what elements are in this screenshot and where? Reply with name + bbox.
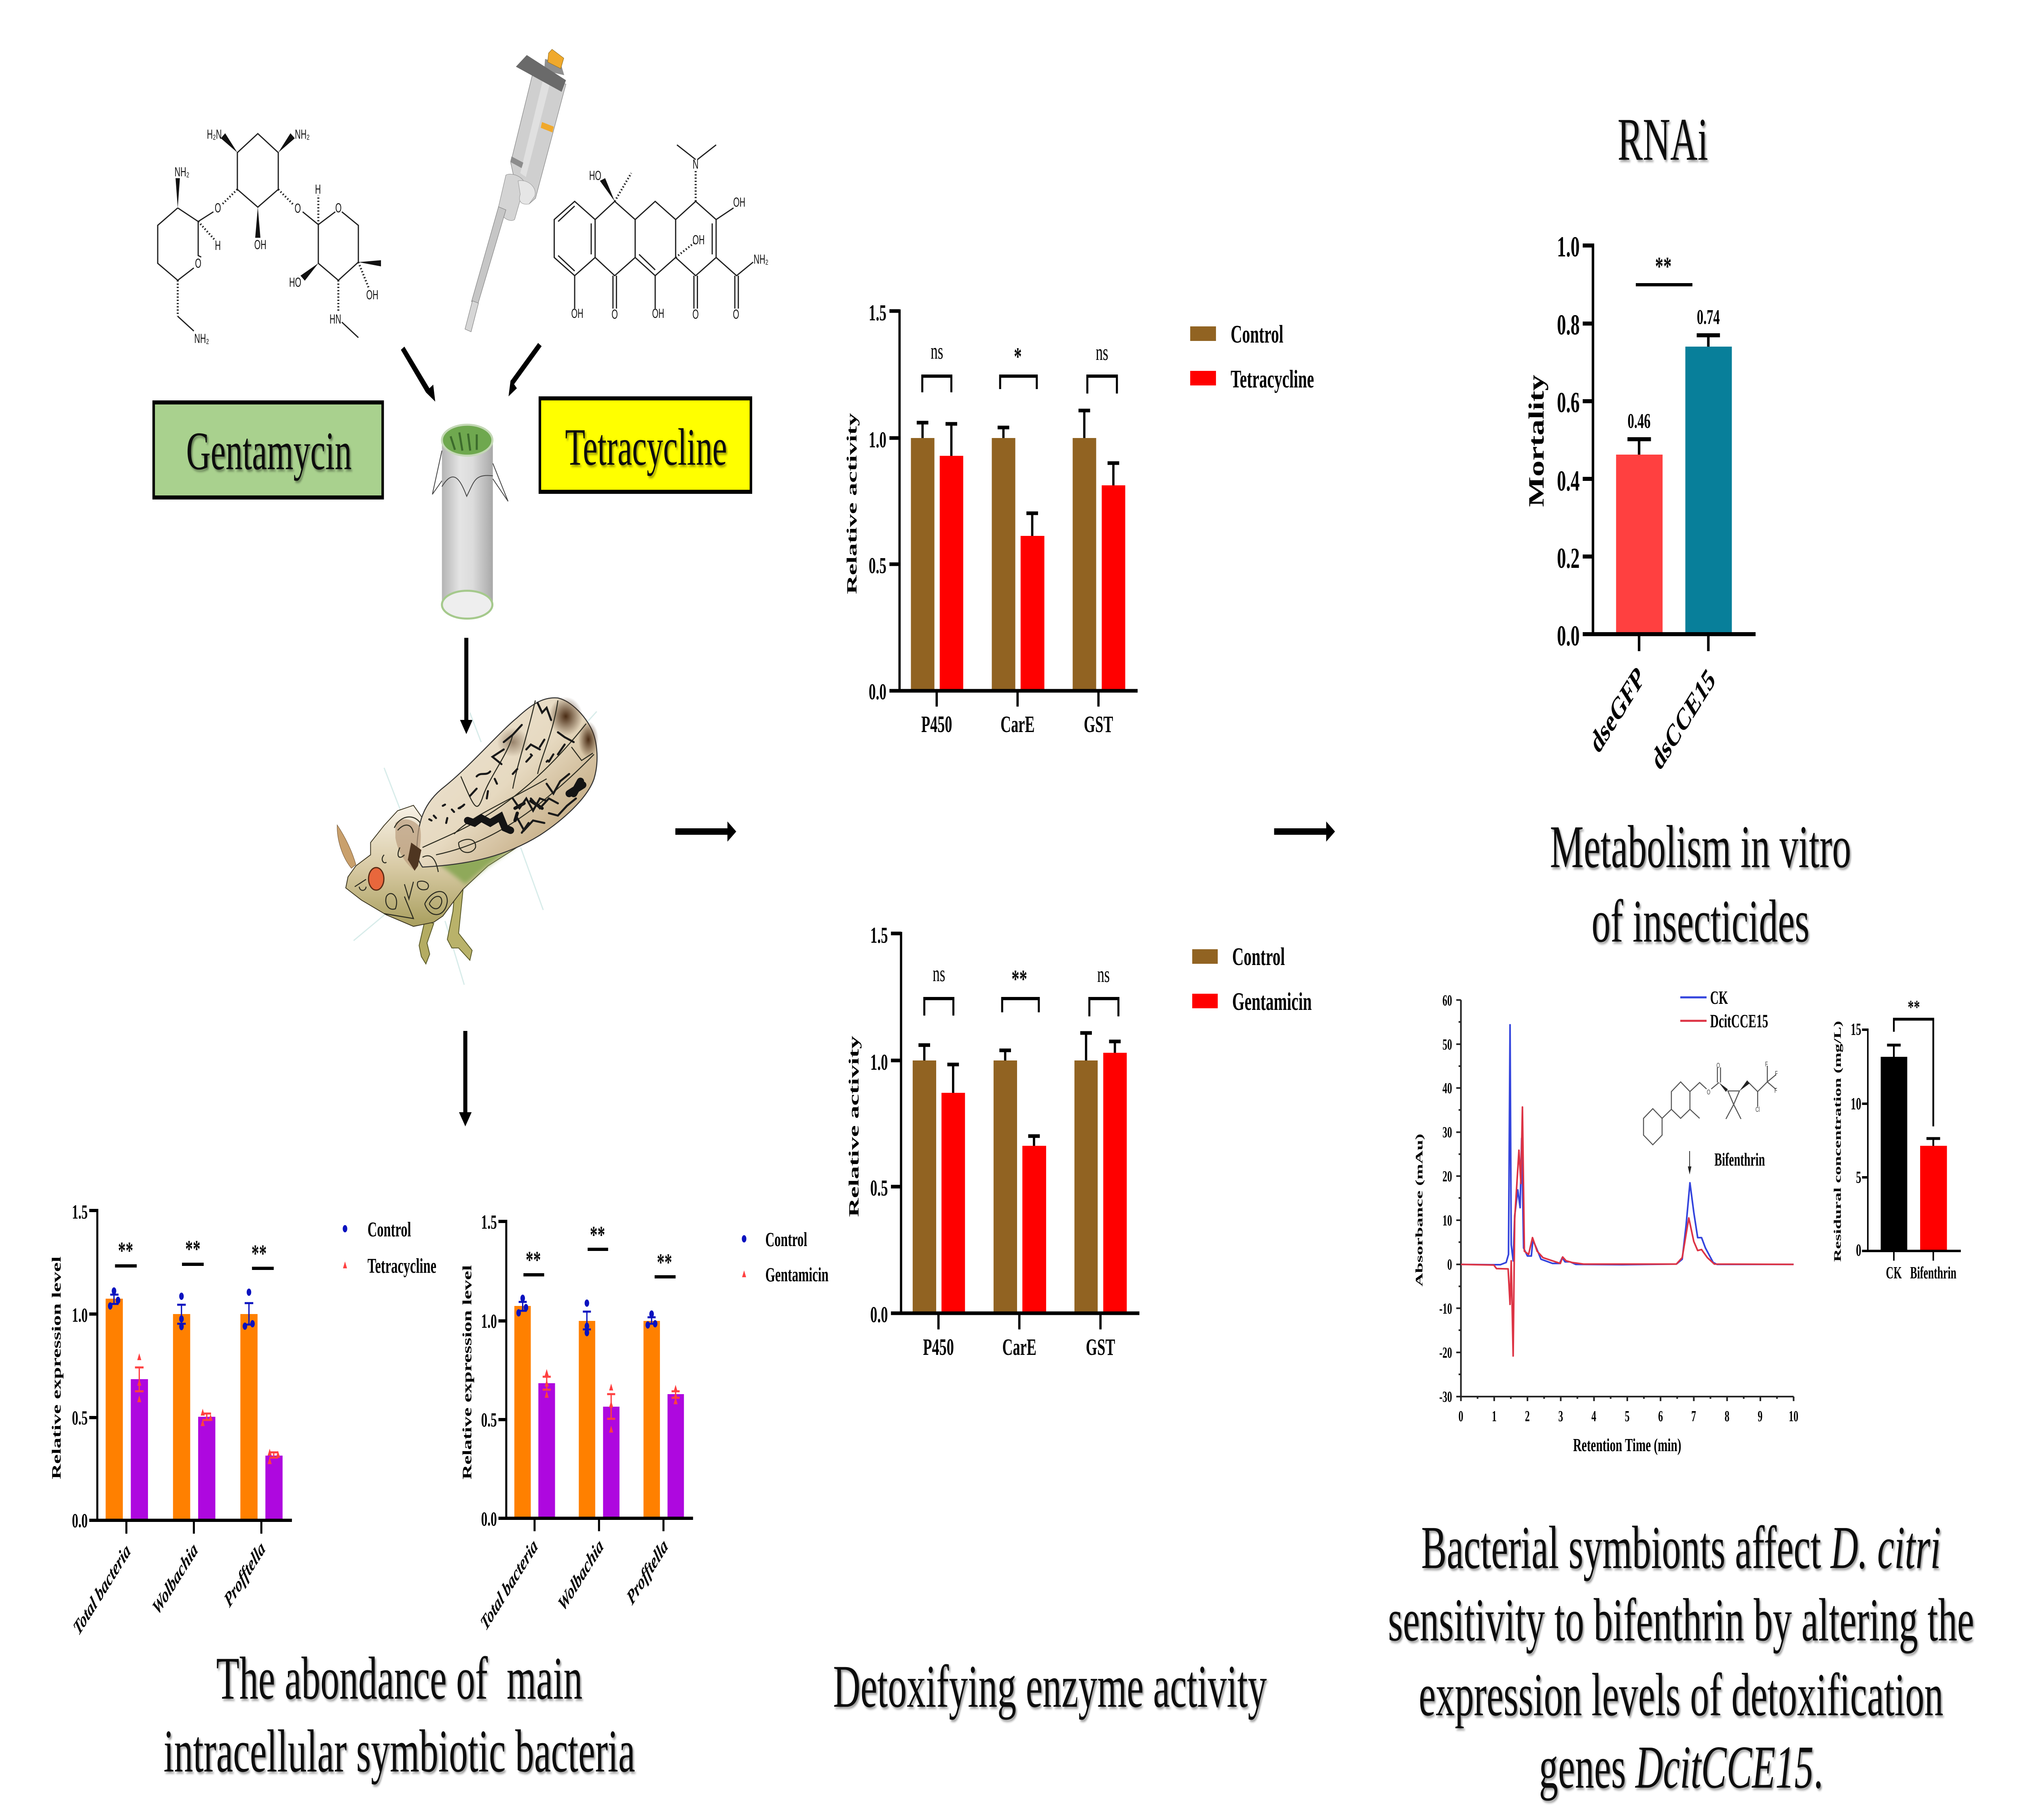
chart: mortality after RNAi (1524, 231, 1756, 777)
tick labels: -20 (1439, 1344, 1452, 1361)
axis labels (461, 1211, 670, 1635)
significance marks (115, 1235, 274, 1268)
significance mark: ** (1655, 252, 1671, 281)
axes (1583, 243, 1756, 651)
significance marks: ** (252, 1240, 266, 1267)
axis labels: Relative expression level (461, 1265, 474, 1479)
molecule: bifenthrin: F (1775, 1069, 1778, 1078)
significance brackets: ns (1096, 340, 1108, 365)
error bars (918, 1033, 1121, 1146)
axis labels (1832, 1020, 1956, 1282)
legend: Tetracycline (1231, 365, 1314, 393)
axis labels: CarE (1000, 712, 1035, 737)
molecule: gentamycin structure (158, 127, 381, 346)
legend: DcitCCE15 (1710, 1011, 1768, 1032)
arrow: bifenthrin peak (1688, 1151, 1691, 1175)
treatment points and error bars (543, 1369, 680, 1433)
axis labels: dseGFP (1586, 660, 1649, 760)
error bars (1887, 1045, 1940, 1146)
axis labels: 1.0 (481, 1310, 497, 1333)
axis labels: 1.5 (870, 923, 888, 948)
molecule: gentamycin structure: O (195, 256, 201, 271)
icon: feeding tube (432, 425, 508, 619)
axis labels: Relative activity (846, 1036, 862, 1217)
axis labels: CK (1886, 1263, 1902, 1282)
molecule: gentamycin structure: NH₂ (295, 127, 310, 142)
axes (89, 1209, 292, 1534)
legend (742, 1229, 829, 1286)
axis labels: 1.0 (72, 1304, 88, 1327)
molecule: gentamycin structure: H (315, 182, 321, 197)
significance brackets (922, 339, 1117, 394)
axis labels: Relative expression level (50, 1256, 63, 1479)
molecule: tetracycline structure: N (693, 157, 698, 171)
axis labels: 0.5 (72, 1407, 88, 1429)
axis labels: 0.0 (481, 1508, 497, 1530)
axis titles: Retention Time (min) (1573, 1435, 1681, 1456)
axis labels: 0.4 (1557, 465, 1580, 497)
tick labels: 30 (1442, 1124, 1452, 1141)
axis labels: 1.5 (481, 1211, 497, 1234)
tick labels: 60 (1442, 992, 1452, 1009)
chart: symbiont abundance, tetracycline (50, 1201, 436, 1640)
legend (1192, 943, 1312, 1016)
chart: HPLC chromatogram (1414, 987, 1798, 1456)
significance marks: ** (590, 1221, 605, 1248)
axis labels: Profftella (221, 1537, 268, 1612)
bars (106, 1299, 283, 1520)
heading: conclusion: Bacterial symbionts affect D. citri (1421, 1514, 1941, 1582)
heading: metabolism in vitro: Metabolism in vitro (1550, 814, 1851, 881)
legend: Gentamicin (765, 1264, 829, 1286)
axis titles: Absorbance (mAu) (1414, 1134, 1425, 1287)
axis labels: 0.8 (1557, 309, 1580, 341)
treatment points and error bars (135, 1353, 280, 1464)
legend: CK (1710, 987, 1728, 1008)
axis labels: dsCCE15 (1648, 662, 1720, 777)
legend: Control (1231, 320, 1284, 348)
axis labels: 5 (1856, 1168, 1861, 1187)
significance bracket: ** (1908, 996, 1920, 1018)
tick labels: 1 (1492, 1407, 1497, 1424)
axis labels: 0.0 (870, 1302, 888, 1327)
arrow: symbionts to enzyme activity (675, 821, 736, 842)
axis labels: 1.5 (869, 301, 886, 326)
arrow: enzyme activity to RNAi (1274, 821, 1335, 842)
axis labels: 1.0 (1557, 231, 1580, 263)
molecule: gentamycin structure: O (335, 201, 342, 215)
axis labels: 15 (1851, 1020, 1861, 1039)
molecule: tetracycline structure: NH₂ (754, 252, 768, 267)
heading: symbiont abundance: The abondance of main (216, 1645, 582, 1712)
axes (1862, 1029, 1961, 1261)
bars (1616, 347, 1732, 634)
tick labels: 50 (1442, 1036, 1452, 1053)
heading: conclusion: genes DcitCCE15. (1539, 1734, 1823, 1801)
chart: enzyme activity, tetracycline (844, 301, 1314, 737)
tick labels: 7 (1691, 1407, 1696, 1424)
heading: RNAi: RNAi (1618, 106, 1708, 174)
tick labels: 9 (1758, 1407, 1762, 1424)
significance marks: ** (118, 1237, 133, 1264)
axis labels: 0.6 (1557, 386, 1580, 419)
heading: conclusion (1388, 1514, 1974, 1801)
molecule: tetracycline structure: HO (589, 168, 601, 183)
axis labels: 0.5 (481, 1409, 497, 1431)
molecule: gentamycin structure: H₂N (207, 127, 222, 142)
legend (1680, 987, 1768, 1032)
significance brackets: * (1014, 343, 1022, 370)
axis labels: 0.0 (1557, 620, 1580, 652)
arrow: gentamycin to tube (401, 347, 435, 402)
molecule: tetracycline structure: O (733, 307, 739, 322)
axis labels: 0 (1856, 1241, 1861, 1260)
tick labels: 40 (1442, 1079, 1452, 1096)
traces (1461, 1025, 1794, 1356)
axis labels: 0.5 (869, 553, 886, 578)
legend: Control (1232, 943, 1285, 971)
heading: conclusion: sensitivity to bifenthrin by altering the (1388, 1587, 1974, 1654)
significance brackets: ** (1011, 965, 1027, 993)
axis labels (846, 923, 1115, 1360)
icon: psyllid insect (337, 697, 599, 985)
control points and error bars (108, 1287, 255, 1330)
significance bracket (1894, 996, 1933, 1126)
axis labels: Bifenthrin (1910, 1263, 1956, 1282)
molecule: tetracycline structure: OH (571, 306, 583, 321)
tick labels: 3 (1558, 1407, 1563, 1424)
arrow: psyllid to symbiont charts (459, 1031, 472, 1126)
value labels: 0.74 (1697, 305, 1720, 329)
heading: detoxifying enzyme activity: Detoxifying enzyme activity (833, 1653, 1267, 1721)
legend (343, 1218, 436, 1278)
axis labels: Wolbachia (150, 1538, 201, 1619)
significance marks: ** (185, 1235, 201, 1262)
axis labels (1524, 231, 1720, 777)
tick labels (1439, 992, 1798, 1424)
axis labels: Relative activity (844, 413, 860, 594)
axis labels: Mortality (1524, 375, 1548, 507)
tick labels: -10 (1439, 1300, 1452, 1317)
axis labels: Wolbachia (555, 1534, 606, 1616)
arrow: tube to psyllid (460, 638, 473, 734)
molecule: gentamycin structure: HN (330, 312, 341, 326)
significance mark (1636, 252, 1692, 285)
axis labels: CarE (1002, 1335, 1036, 1360)
heading: metabolism in vitro: of insecticides (1592, 888, 1809, 955)
molecule: bifenthrin: F (1765, 1060, 1768, 1069)
axis labels: 0.2 (1557, 542, 1580, 574)
molecule: tetracycline structure (554, 145, 768, 322)
axis labels (844, 301, 1113, 737)
error bars (917, 411, 1119, 536)
molecule: gentamycin structure: O (294, 201, 301, 216)
significance brackets (924, 961, 1119, 1016)
molecule: gentamycin structure: OH (254, 237, 266, 252)
axis labels: P450 (921, 712, 952, 737)
label: Tetracycline (540, 398, 751, 492)
tick labels: -30 (1439, 1388, 1452, 1405)
label: Tetracycline: Tetracycline (565, 418, 727, 476)
tick labels: 0 (1447, 1256, 1452, 1273)
molecule: bifenthrin: Bifenthrin (1714, 1150, 1765, 1170)
bars (913, 1053, 1127, 1313)
legend (1190, 320, 1314, 393)
significance marks: ** (657, 1249, 672, 1276)
heading: conclusion: expression levels of detoxification (1419, 1661, 1943, 1729)
axis labels: Total bacteria (70, 1539, 133, 1640)
bars (1881, 1057, 1947, 1251)
molecule: bifenthrin: Cl (1756, 1105, 1760, 1114)
chart: symbiont abundance, gentamicin (461, 1211, 829, 1635)
axis labels: Profftella (624, 1534, 670, 1610)
axis labels: Total bacteria (478, 1534, 541, 1635)
molecule: gentamycin structure: H (215, 238, 221, 253)
axes (891, 932, 1140, 1329)
error bars (1627, 335, 1720, 455)
tick labels: 10 (1789, 1407, 1798, 1424)
significance brackets: ns (931, 339, 943, 364)
molecule: bifenthrin: F (1775, 1086, 1777, 1095)
label: Gentamycin: Gentamycin (186, 421, 352, 481)
arrow: tetracycline to tube (509, 343, 541, 396)
tick labels: 20 (1442, 1168, 1452, 1185)
legend: Gentamicin (1232, 988, 1312, 1016)
legend: Tetracycline (368, 1254, 436, 1278)
molecule: gentamycin structure: NH₂ (194, 331, 209, 346)
bars (514, 1306, 684, 1518)
label: Gentamycin (154, 402, 383, 497)
molecule: tetracycline structure: OH (733, 195, 745, 210)
tick labels: 8 (1725, 1407, 1730, 1424)
axis labels: GST (1086, 1335, 1115, 1360)
axis labels: P450 (923, 1335, 954, 1360)
axis titles (1414, 1134, 1681, 1456)
axis labels: Residural concentration (mg/L) (1832, 1021, 1843, 1262)
heading: metabolism in vitro (1550, 814, 1851, 955)
legend: Control (765, 1229, 807, 1251)
axis labels: GST (1084, 712, 1113, 737)
legend: Control (368, 1218, 411, 1241)
heading: symbiont abundance (163, 1645, 635, 1785)
tick labels: 5 (1625, 1407, 1630, 1424)
molecule: bifenthrin: O (1716, 1061, 1720, 1070)
significance brackets: ns (933, 961, 945, 986)
tick labels: 2 (1525, 1407, 1530, 1424)
tick labels: 10 (1442, 1212, 1452, 1229)
molecule: gentamycin structure: OH (366, 288, 379, 302)
significance marks (523, 1221, 676, 1277)
molecule: gentamycin structure: O (215, 201, 221, 215)
chart: enzyme activity, gentamicin (846, 923, 1312, 1360)
axis labels: 0.0 (869, 679, 886, 705)
tick labels: 4 (1591, 1407, 1596, 1424)
molecule: tetracycline structure: O (692, 307, 699, 322)
axis labels: 0.5 (870, 1176, 888, 1201)
value labels (1628, 305, 1720, 433)
bars (911, 438, 1125, 691)
molecule: tetracycline structure: OH (652, 306, 664, 321)
tick labels: 6 (1658, 1407, 1663, 1424)
molecule: tetracycline structure: O (611, 307, 618, 322)
significance marks: ** (526, 1246, 541, 1273)
axis labels (50, 1201, 268, 1640)
axes (1456, 1000, 1794, 1401)
tick labels: 0 (1459, 1407, 1463, 1424)
chart: residual concentration (1832, 996, 1961, 1282)
molecule: gentamycin structure: NH₂ (175, 165, 189, 179)
axis labels: 1.0 (870, 1050, 888, 1075)
molecule: bifenthrin: O (1707, 1088, 1710, 1096)
heading: symbiont abundance: intracellular symbiotic bacteria (163, 1718, 635, 1785)
molecule: gentamycin structure: HO (289, 275, 301, 290)
control points and error bars (516, 1295, 658, 1336)
molecule: tetracycline structure: OH (693, 233, 704, 247)
axis labels: 1.5 (72, 1201, 88, 1223)
value labels: 0.46 (1628, 409, 1651, 433)
axis labels: 1.0 (869, 427, 886, 453)
axes (498, 1220, 693, 1531)
icon: pipette (465, 49, 566, 332)
significance brackets: ns (1097, 962, 1110, 987)
axis labels: 0.0 (72, 1510, 88, 1532)
molecule: bifenthrin (1643, 1060, 1778, 1170)
axes (889, 309, 1138, 707)
axis labels: 10 (1851, 1094, 1861, 1113)
